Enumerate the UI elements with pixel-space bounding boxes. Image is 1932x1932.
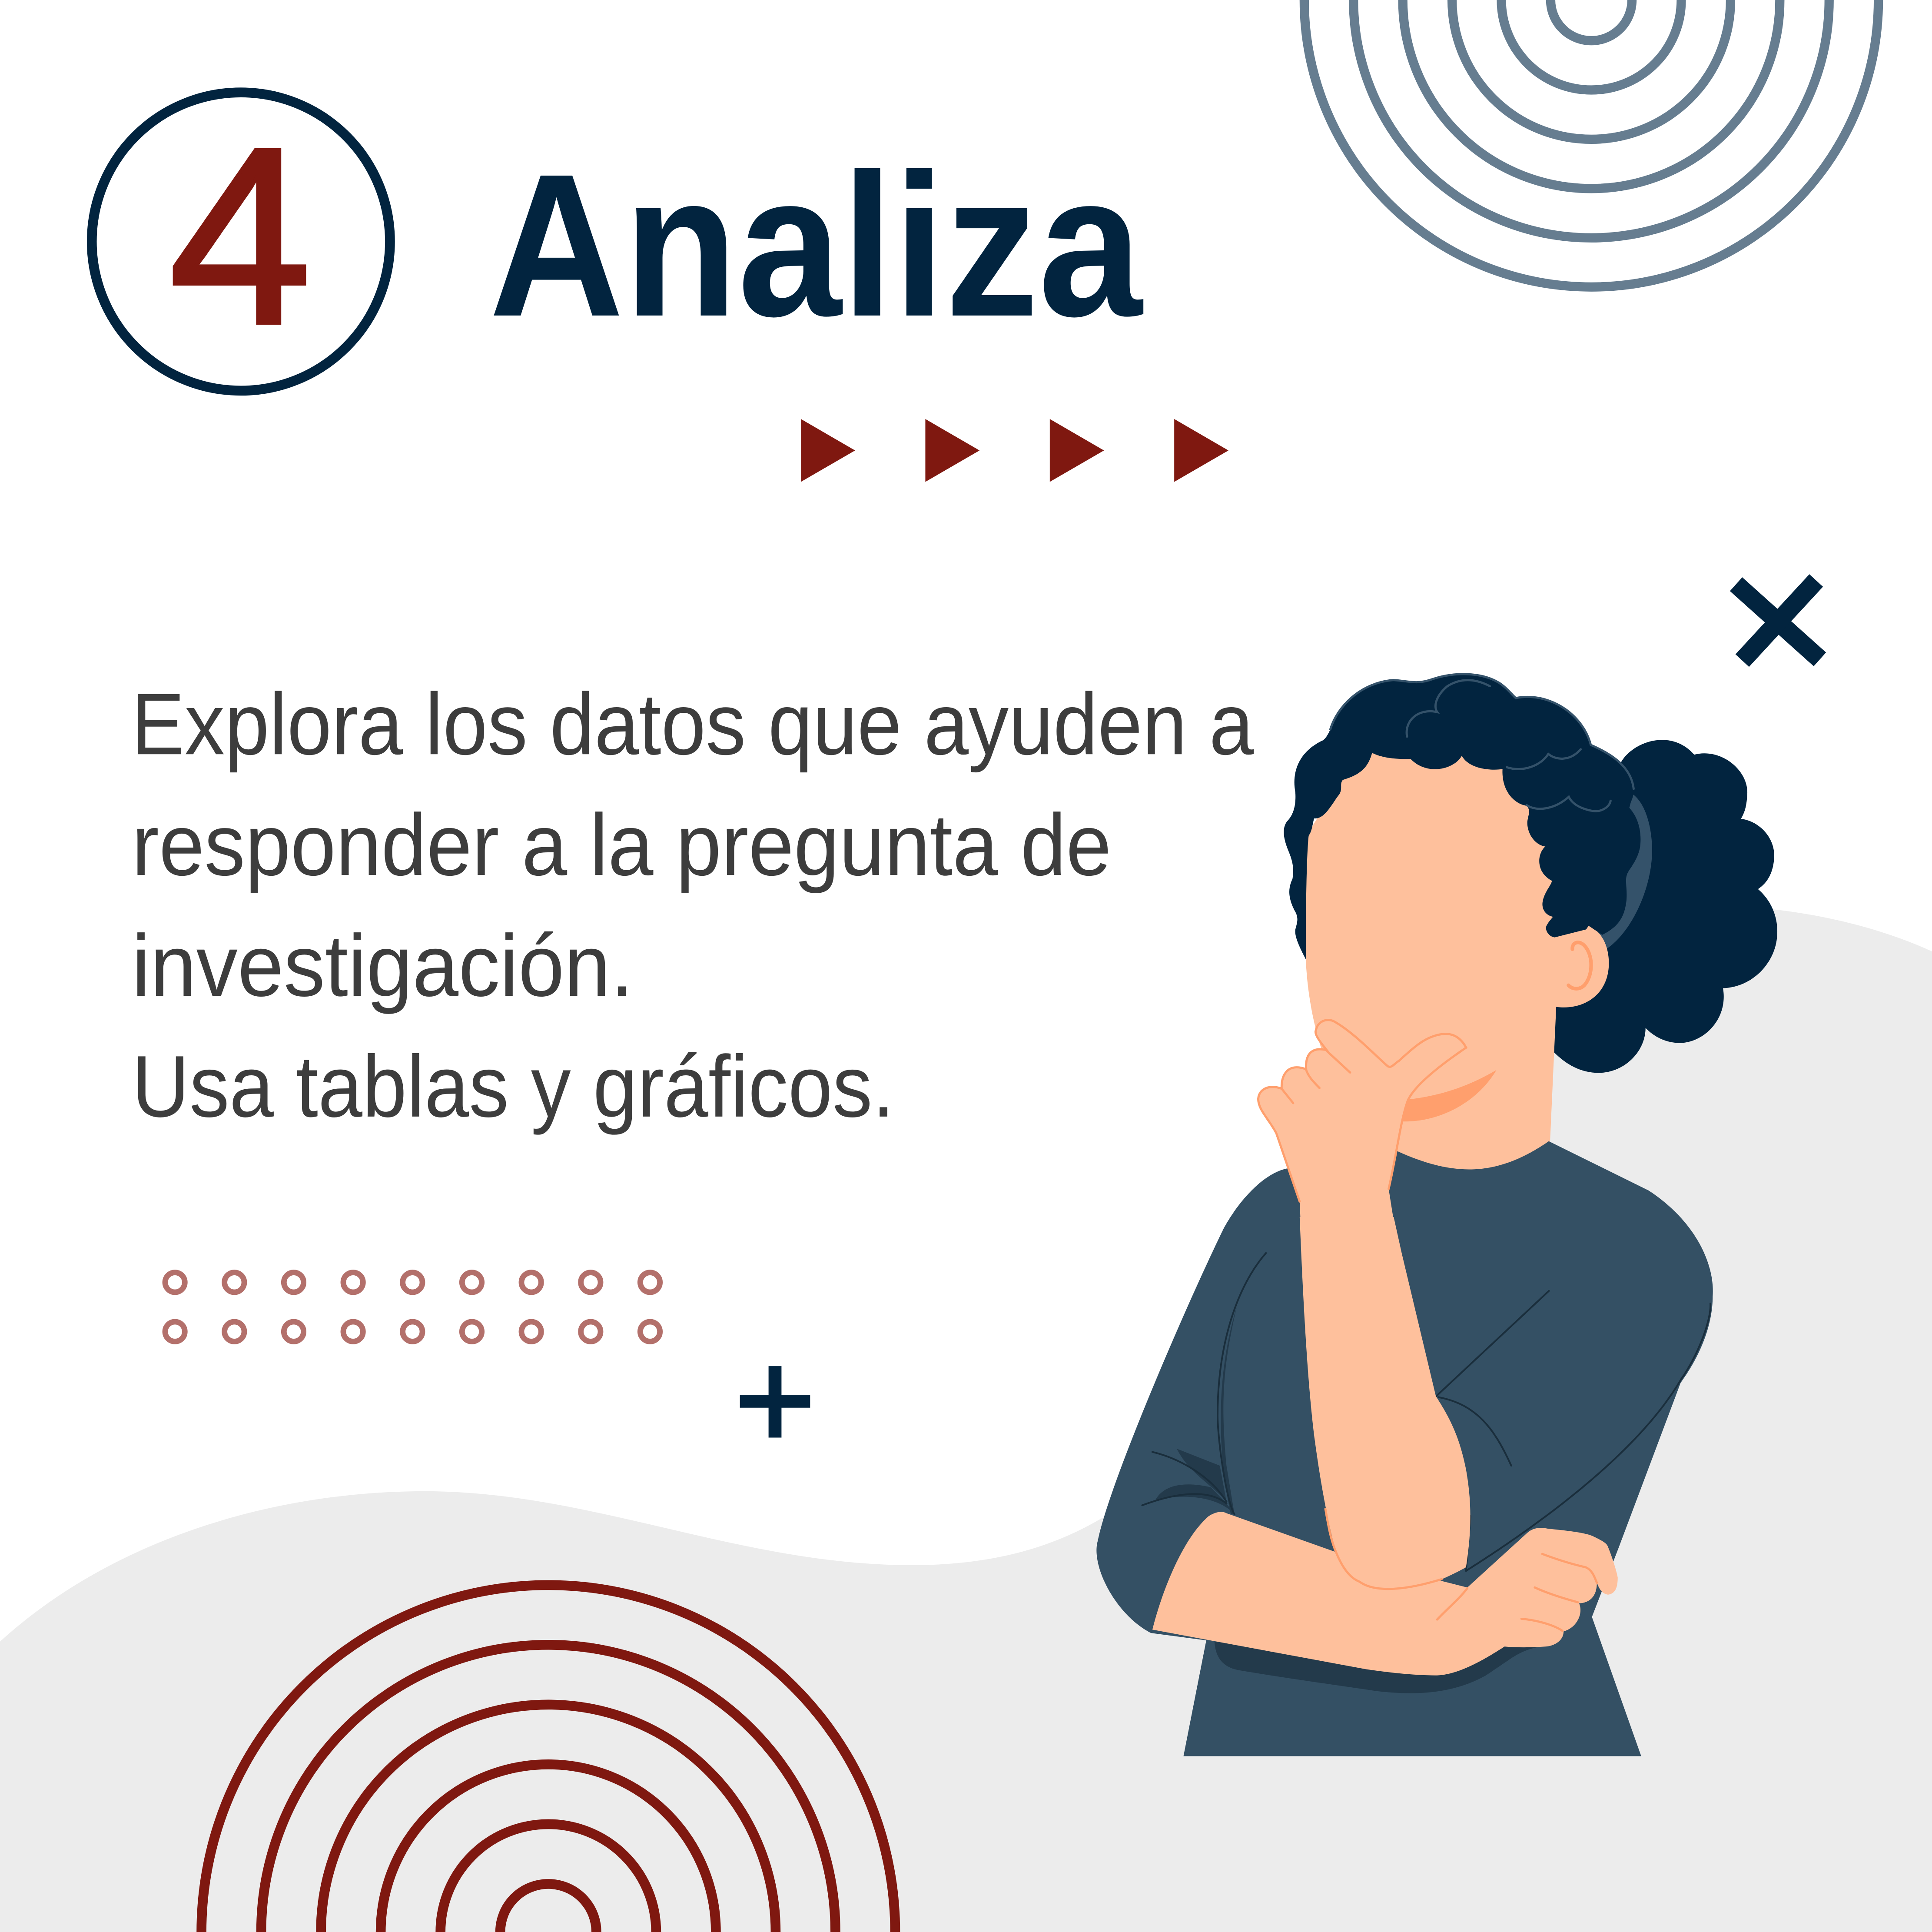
hand outline: [1258, 1020, 1466, 1201]
sleeve folds: [1142, 1253, 1710, 1571]
hair strands: [1330, 674, 1633, 811]
finger lines: [1281, 1051, 1350, 1103]
line 4: Usa tablas y gráficos.: [132, 1037, 895, 1135]
lower forearm and hand: [1152, 1512, 1618, 1676]
hand on chin: [1258, 1020, 1466, 1218]
badge circle: [92, 93, 390, 391]
body text: [131, 675, 1254, 1135]
concentric rings top right: [1304, 0, 1879, 287]
hand shape: [1258, 1020, 1466, 1218]
hair band: [1599, 794, 1652, 949]
concentric rings bottom left: [202, 1585, 895, 1932]
head and hair: [1284, 674, 1777, 1193]
line 2: responder a la pregunta de: [132, 796, 1112, 894]
shirt: [1096, 1141, 1713, 1756]
smile: [1402, 1070, 1497, 1121]
upper forearm: [1300, 1217, 1471, 1591]
arrows row: [801, 419, 1228, 482]
illustration: thinking woman: [1096, 674, 1777, 1756]
icon: plus: [740, 1366, 810, 1438]
arm and finger lines: [1325, 1509, 1597, 1631]
dot grid: [165, 1273, 660, 1341]
icon: cross: [1736, 580, 1820, 661]
face and neck: [1305, 742, 1609, 1193]
number 4: 4: [169, 95, 312, 376]
hair bun: [1552, 740, 1777, 1073]
step number badge: [92, 93, 390, 391]
ear detail: [1568, 942, 1591, 989]
line 3: investigación.: [132, 917, 633, 1014]
arm shadow: [1215, 1642, 1546, 1693]
grey wave background: [0, 906, 1932, 1932]
arms: [1142, 1217, 1710, 1693]
line 1: Explora los datos que ayuden a: [131, 675, 1254, 773]
title: Analiza: [489, 132, 1143, 359]
front hair: [1284, 674, 1640, 960]
